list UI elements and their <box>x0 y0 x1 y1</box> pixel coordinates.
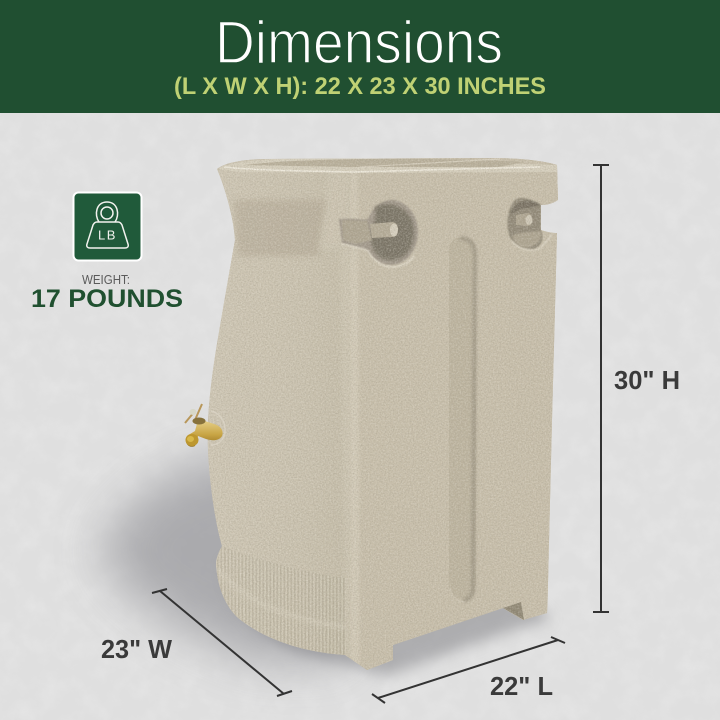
arrow: length dimension line <box>372 637 565 703</box>
arrow: width dimension line <box>152 589 292 696</box>
speckled stone texture <box>200 150 570 680</box>
icon: weight badge <box>74 192 142 260</box>
label: height: 30" H <box>614 365 680 395</box>
label: width: 23" W <box>101 634 172 664</box>
right notch mount <box>507 198 542 249</box>
foot underside shadow <box>503 602 524 620</box>
left curved face <box>208 159 313 651</box>
arrow: height dimension line <box>593 165 609 612</box>
rain barrel product <box>200 150 570 680</box>
vertical slot recess <box>449 237 476 601</box>
weight label: WEIGHT: <box>82 273 130 287</box>
icon: weight badge: LB <box>98 228 117 242</box>
header band <box>0 0 720 113</box>
drop shadow of the barrel <box>100 455 552 676</box>
right flat face <box>400 158 558 614</box>
left mount peg <box>370 222 398 238</box>
weight value: 17 POUNDS <box>31 285 183 313</box>
right mount peg <box>516 213 532 226</box>
icon: brass spigot <box>185 404 225 447</box>
top rim <box>217 158 557 173</box>
title: Dimensions <box>215 9 503 76</box>
label: length: 22" L <box>490 671 553 701</box>
shaded recess under the shoulder <box>234 200 328 256</box>
corner highlight band <box>325 178 348 466</box>
ribbed base <box>217 547 344 654</box>
left keyhole mount <box>339 200 418 265</box>
subtitle: overall dimensions: (L X W X H): 22 X 23 X 30 INCHES <box>174 73 546 100</box>
